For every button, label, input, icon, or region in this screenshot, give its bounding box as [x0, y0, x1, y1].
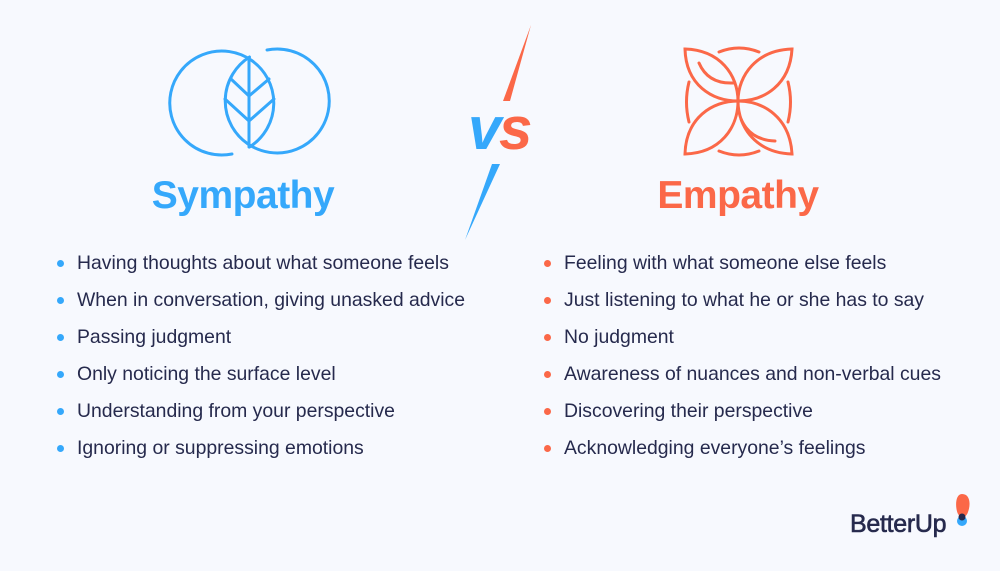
list: empathy traits: Acknowledging everyone’s feelings: [564, 437, 865, 459]
list: sympathy traits: When in conversation, giving unasked advice: [77, 289, 465, 311]
logo: BetterUp: [850, 494, 970, 538]
list: empathy traits: Feeling with what someone else feels: [564, 252, 886, 274]
list: sympathy traits: Only noticing the surface level: [77, 363, 336, 385]
logo: BetterUp: BetterUp: [850, 510, 946, 538]
heading: Empathy: Empathy: [657, 174, 819, 217]
heading: Sympathy: Sympathy: [152, 174, 334, 217]
list: empathy traits: Awareness of nuances and non-verbal cues: [564, 363, 941, 385]
vs mark: v: [468, 95, 505, 162]
list: sympathy traits: Understanding from your perspective: [77, 400, 395, 422]
list: empathy traits: No judgment: [564, 326, 674, 348]
list: sympathy traits: Passing judgment: [77, 326, 231, 348]
list: empathy traits: Discovering their perspective: [564, 400, 813, 422]
vs mark: s: [499, 95, 532, 162]
list: empathy traits: [544, 252, 941, 459]
list: empathy traits: Just listening to what he or she has to say: [564, 289, 924, 311]
list: sympathy traits: Having thoughts about what someone feels: [77, 252, 449, 274]
list: sympathy traits: [57, 252, 465, 459]
list: sympathy traits: Ignoring or suppressing emotions: [77, 437, 364, 459]
